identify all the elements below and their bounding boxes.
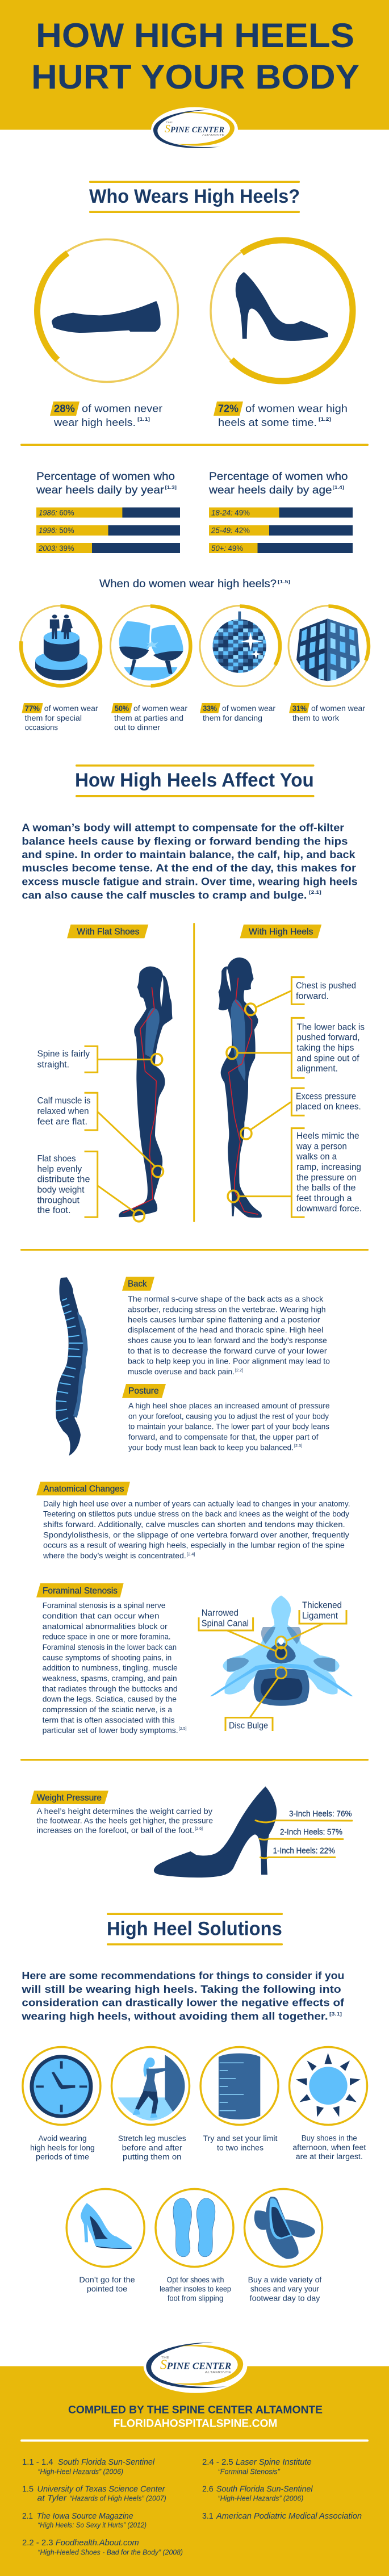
bar chart: by age: 50+: 49% (211, 543, 243, 553)
caption: 31%: of women wear (311, 704, 365, 713)
tip: ruler: to two inches (217, 2144, 263, 2152)
tip: flats: footwear day to day (250, 2294, 320, 2302)
tip: insoles: foot from slipping (168, 2294, 223, 2302)
callout text: ramp: way a person (296, 1141, 347, 1151)
caption: 77%: them for special (25, 713, 82, 722)
callouts: flat shoes (85, 1046, 163, 1222)
bar chart: by year: 1986: 60% (39, 508, 74, 517)
callout text: lower back: alignment. (296, 1064, 338, 1074)
caption: 50% (111, 703, 187, 732)
callout text: knees: placed on knees. (296, 1102, 361, 1111)
heading: High Heel Solutions (107, 1913, 283, 1946)
callout text: ramp: downward force. (296, 1204, 362, 1214)
text: foraminal stenosis: compression of the sciatic nerve, is a (43, 1705, 172, 1714)
label: Weight Pressure (30, 1791, 108, 1804)
tip: flats (244, 2189, 323, 2302)
chart heading: by age: [1.4] (333, 485, 344, 490)
references: left column (22, 2458, 183, 2557)
caption: 50%: of women wear (133, 704, 187, 713)
callout text: flat shoes weight: body weight (37, 1185, 85, 1195)
bar chart: by age: 18-24: 49% (211, 508, 250, 517)
tip: insoles: Opt for shoes with (167, 2276, 224, 2284)
callout text: spine fairly straight: straight. (37, 1060, 69, 1069)
tip: stretch: Stretch leg muscles (118, 2134, 186, 2143)
references: left column: “High Heels: So Sexy it Hurts” (2012) (37, 2521, 147, 2529)
callout text: chest: Chest is pushed (296, 981, 356, 991)
callouts: high heels (227, 977, 305, 1217)
intro paragraph: [2.1] (309, 890, 321, 895)
footer credit (68, 2404, 323, 2429)
text: back (128, 1294, 330, 1376)
footer logo: ALTAMONTE (205, 2371, 232, 2374)
text: foraminal stenosis: addition to numbness, tingling, muscle (43, 1663, 178, 1672)
text: anatomical changes: occurs as a result of wearing high heels, especially in the lumbar region of the spine (43, 1541, 345, 1550)
chart heading: by age (208, 470, 348, 496)
donut: 33% dancing (200, 605, 281, 686)
tip: sun (290, 2047, 367, 2161)
chart heading: by year: Percentage of women who (36, 470, 175, 483)
text: back: muscle overuse and back pain. (128, 1367, 235, 1376)
caption: 77%: of women wear (44, 704, 98, 713)
callout text: lower back: The lower back is (296, 1022, 365, 1032)
caption: 50%: them at parties and (114, 713, 183, 722)
callout text: ramp: ramp, increasing (296, 1162, 361, 1172)
text: anatomical changes (43, 1499, 350, 1560)
label: Back: Back (128, 1279, 148, 1289)
references: right column: 2.6 (202, 2485, 214, 2494)
solutions intro: will still be wearing high heels. Taking the following into (21, 1983, 341, 1995)
solutions intro: [3.1] (329, 2012, 342, 2017)
caption: 77%: 77% (25, 704, 40, 713)
label: With High Heels (240, 925, 321, 938)
text: weight pressure: the footwear. As the heels get higher, the pressure (37, 1817, 213, 1825)
bar chart: by year: 1996: 50% (39, 526, 74, 535)
text: posture: your body must lean back to keep you balanced. (128, 1442, 294, 1452)
heading: How High Heels Affect You (75, 764, 315, 797)
callout text: ramp (296, 1131, 362, 1214)
label: With Flat Shoes: With Flat Shoes (77, 927, 140, 937)
text: posture (128, 1401, 330, 1452)
title: HURT YOUR BODY (31, 58, 359, 96)
callout text: flat shoes weight: help evenly (37, 1164, 82, 1174)
footer logo: PINE CENTER (166, 2360, 231, 2371)
caption: 50%: out to dinner (114, 723, 160, 732)
references: left column: “High-Heeled Shoes - Bad for the Body” (2008) (37, 2549, 183, 2557)
heading: High Heel Solutions: High Heel Solutions (107, 1918, 282, 1939)
footer band (0, 2366, 389, 2576)
figure: woman in flat shoes (119, 967, 173, 1217)
references: left column: South Florida Sun-Sentinel (58, 2458, 155, 2467)
caption: 28%: of women never (82, 403, 162, 415)
caption: 50%: 50% (115, 704, 129, 713)
label: Posture (122, 1384, 166, 1398)
text: posture: forward, and to compensate for that, the upper part of (128, 1432, 319, 1441)
scale: heel height pressure: 1-Inch Heels: 22% (273, 1846, 335, 1855)
label: Foraminal Stenosis: Foraminal Stenosis (43, 1586, 118, 1596)
donut: 50% parties (110, 605, 191, 686)
references: right column: “High-Heel Hazards” (2006) (218, 2494, 303, 2502)
text: weight pressure: increases on the forefoot, or ball of the foot. (37, 1826, 194, 1834)
subheading: when do women wear heels: When do women wear high heels? (99, 578, 277, 590)
tip: stretch (111, 2047, 190, 2161)
references: left column: University of Texas Science Center (37, 2485, 166, 2494)
header band (0, 0, 389, 129)
heading: Who Wears High Heels: Who Wears High Heels? (89, 186, 300, 207)
text: posture: A high heel shoe places an increased amount of pressure (128, 1401, 330, 1410)
intro paragraph: excess muscle fatigue and strain. Over time, wearing high heels (22, 875, 358, 887)
callout text: calf muscle: feet are flat. (37, 1117, 87, 1127)
references: left column: at Tyler (37, 2494, 67, 2503)
text: foraminal stenosis: Foraminal stenosis is a spinal nerve (43, 1601, 166, 1610)
tip: pointed toe: pointed toe (87, 2285, 127, 2293)
caption: 28%: [1.1] (137, 417, 150, 422)
references: left column: 1.1 - 1.4 (22, 2458, 53, 2467)
callout text: flat shoes weight (37, 1154, 90, 1215)
intro paragraph: can also cause the calf muscles to cramp and bulge. (22, 889, 307, 901)
bar chart: by year (36, 508, 180, 553)
tip: ruler (200, 2047, 278, 2152)
tip: clock: periods of time (36, 2153, 89, 2161)
chart heading: by year: wear heels daily by year (36, 484, 165, 496)
donut: 31% work (288, 605, 369, 686)
text: back: to that is to decrease the forward curve of your lower (128, 1346, 327, 1355)
callout text: lower back: pushed forward, (296, 1033, 360, 1043)
scale: heel height pressure: 3-Inch Heels: 76% (289, 1809, 352, 1818)
callout text: lower back: taking the hips (296, 1043, 354, 1053)
chart heading: by age: wear heels daily by age (208, 484, 332, 496)
footer credit: FLORIDAHOSPITALSPINE.COM (114, 2418, 277, 2429)
figure: spine (56, 1277, 88, 1456)
references: left column: 2.1 (22, 2512, 33, 2521)
caption: 72%: of women wear high (245, 403, 348, 415)
tip: stretch: putting them on (123, 2153, 182, 2161)
footer logo: S (160, 2357, 167, 2372)
donut: 72% wear heels (184, 212, 380, 409)
text: weight pressure (37, 1807, 213, 1834)
caption: 72%: [1.2] (319, 417, 331, 422)
intro paragraph: and spine. In order to maintain balance, the calf, hip, and back (22, 848, 355, 860)
references: right column: 2.4 - 2.5 (202, 2458, 233, 2467)
references: left column: 1.5 (22, 2485, 34, 2494)
callout text: calf muscle: relaxed when (37, 1107, 89, 1116)
icon: high heel (236, 272, 328, 341)
intro paragraph: muscles become tense. At the end of the day, this makes for (22, 862, 356, 874)
tip: clock (23, 2047, 101, 2161)
footer logo: THE (161, 2356, 170, 2360)
icon: disco ball (212, 612, 266, 673)
subheading: when do women wear heels: [1.5] (278, 579, 290, 584)
label: Posture: Posture (128, 1386, 159, 1396)
callout text: spine fairly straight (37, 1049, 90, 1069)
logo wordmark: S (165, 123, 170, 135)
callout text: flat shoes weight: throughout (37, 1195, 80, 1205)
solutions intro (21, 1969, 345, 2022)
text: back: displacement of the head and thoracic spine. High heel (128, 1325, 323, 1335)
tip: sun: Buy shoes in the (302, 2134, 357, 2142)
callouts: vertebra labels (199, 1601, 346, 1731)
intro paragraph (22, 821, 358, 901)
bar chart: by year: 2003: 39% (38, 543, 74, 553)
intro paragraph: balance heels cause by flexing or forward bending the hips (22, 835, 348, 847)
references: left column: 2.2 - 2.3 (22, 2539, 53, 2548)
scale: heel height pressure (256, 1809, 352, 1858)
solutions intro: consideration can drastically lower the negative effects of (22, 1997, 345, 2009)
heading: Who Wears High Heels (89, 181, 300, 213)
scale: heel height pressure: 2-Inch Heels: 57% (280, 1828, 342, 1837)
text: foraminal stenosis: Foraminal stenosis in the lower back can (43, 1642, 177, 1651)
tip: insoles (156, 2189, 233, 2302)
tip: pointed toe: Don’t go for the (79, 2276, 135, 2284)
callout text: ramp: walks on a (296, 1152, 337, 1162)
tip: ruler: Try and set your limit (203, 2134, 278, 2143)
references: right column: 3.1 (202, 2512, 214, 2521)
tip: pointed toe (66, 2189, 144, 2293)
text: posture: on your forefoot, causing you to adjust the rest of your body (128, 1411, 329, 1420)
callouts: vertebra labels: Spinal Canal (202, 1619, 249, 1628)
text: anatomical changes: Daily high heel use over a number of years can actually lead to changes in your anatomy. (43, 1499, 350, 1508)
caption: 77%: occasions (25, 723, 58, 732)
logo wordmark: ALTAMONTE (202, 133, 224, 136)
text: weight pressure: [2.6] (195, 1827, 203, 1831)
references: left column: Foodhealth.About.com (56, 2539, 139, 2548)
text: foraminal stenosis: anatomical abnormalities block or (43, 1621, 168, 1630)
figure: big high heel (154, 1787, 277, 1877)
caption: 28% (50, 402, 162, 428)
text: anatomical changes: shifts forward. Additionally, calve muscles can shorten and tendons may thicken. (43, 1520, 345, 1529)
text: posture: to maintain your balance. The lower part of your body leans (128, 1422, 329, 1431)
text: anatomical changes: where the body’s weight is concentrated. (43, 1551, 186, 1560)
label: With High Heels: With High Heels (249, 927, 313, 937)
callout text: chest (296, 981, 356, 1001)
label: Foraminal Stenosis (36, 1583, 124, 1598)
text: foraminal stenosis: cause symptoms of shooting pains, in (43, 1653, 172, 1662)
bar chart: by age: 25-49: 42% (211, 526, 250, 535)
tip: flats: shoes and vary your (250, 2285, 319, 2293)
callout text: ramp: the pressure on (296, 1173, 357, 1182)
logo wordmark (165, 121, 224, 136)
caption: 77% (22, 703, 98, 732)
text: foraminal stenosis: reduce space in one or more foramina. (43, 1632, 171, 1641)
callout text: flat shoes weight: Flat shoes (37, 1154, 76, 1164)
callout text: ramp: feet through a (296, 1194, 352, 1203)
references: left column: “Hazards of High Heels” (2007) (69, 2494, 166, 2502)
callout text: knees (296, 1092, 361, 1111)
caption: 33%: of women wear (222, 704, 275, 713)
references: left column: The Iowa Source Magazine (37, 2512, 133, 2521)
footer logo (144, 2339, 247, 2393)
text: anatomical changes: Spondylolisthesis, or the slippage of one vertebra forward over another, frequently (43, 1530, 349, 1539)
callouts: vertebra labels: Disc Bulge (229, 1721, 268, 1730)
references: right column: South Florida Sun-Sentinel (216, 2485, 313, 2494)
donut: 28% never wear heels (9, 212, 205, 409)
icon: wine glasses (119, 621, 183, 680)
callouts: vertebra labels: Ligament (302, 1611, 338, 1621)
label: Weight Pressure: Weight Pressure (37, 1793, 102, 1803)
text: foraminal stenosis: down the legs. Sciatica, caused by the (43, 1695, 177, 1704)
callouts: vertebra labels: Narrowed (202, 1608, 239, 1618)
logo wordmark: THE (166, 121, 173, 124)
tip: clock: Avoid wearing (39, 2134, 86, 2143)
caption: 72% (214, 402, 348, 428)
callout text: ramp: Heels mimic the (296, 1131, 359, 1141)
text: back: [2.2] (235, 1369, 243, 1373)
text: foraminal stenosis: [2.5] (179, 1727, 187, 1731)
references: right column: “Forminal Stenosis” (218, 2468, 281, 2476)
intro paragraph: A woman’s body will attempt to compensate for the off-kilter (22, 821, 344, 833)
label: Anatomical Changes: Anatomical Changes (43, 1484, 124, 1494)
callout text: flat shoes weight: distribute the (37, 1175, 90, 1185)
tip: sun: are at their largest. (296, 2152, 363, 2161)
logo wordmark: PINE CENTER (170, 126, 224, 135)
callout text: ramp: the balls of the (296, 1184, 355, 1193)
tip: clock: high heels for long (30, 2144, 95, 2152)
footer credit: COMPILED BY THE SPINE CENTER ALTAMONTE (68, 2404, 323, 2416)
text: back: heels causes lumbar spine flattening and a posterior (128, 1315, 320, 1324)
tip: flats: Buy a wide variety of (248, 2276, 322, 2284)
callout text: spine fairly straight: Spine is fairly (37, 1049, 90, 1059)
figure: woman in high heels (218, 957, 262, 1218)
text: foraminal stenosis (42, 1601, 187, 1735)
caption: 28%: wear high heels. (53, 417, 136, 428)
figure: vertebra diagram (210, 1595, 353, 1717)
callout text: lower back: and spine out of (296, 1053, 359, 1063)
chart heading: by year: [1.3] (165, 485, 177, 490)
caption: 31% (289, 703, 365, 722)
references: right column: Laser Spine Institute (236, 2458, 312, 2467)
caption: 31%: them to work (292, 713, 340, 722)
text: foraminal stenosis: that radiates through the buttocks and (43, 1684, 178, 1693)
caption: 33%: 33% (203, 704, 217, 713)
label: With Flat Shoes (67, 925, 148, 938)
text: foraminal stenosis: particular set of lower body symptoms. (43, 1726, 178, 1735)
chart heading: by age: Percentage of women who (209, 470, 348, 483)
text: back: shoes cause you to lean forward and the body’s response (128, 1336, 327, 1345)
text: back: back to help keep you in line. Poor alignment may lead to (128, 1357, 330, 1366)
text: posture: [2.3] (294, 1444, 302, 1448)
callouts: vertebra labels: Thickened (302, 1601, 342, 1611)
caption: 72%: 72% (218, 403, 239, 415)
icon: flat shoe (52, 301, 161, 333)
callout text: flat shoes weight: the foot. (37, 1206, 70, 1215)
icon: wedding cake (35, 614, 87, 680)
callout text: calf muscle: Calf muscle is (37, 1096, 91, 1106)
tip: sun: afternoon, when feet (292, 2143, 366, 2152)
chart heading: by year (36, 470, 177, 496)
caption: 33%: them for dancing (203, 713, 262, 722)
donut: 77% special occasions (20, 605, 101, 686)
text: back: The normal s-curve shape of the back acts as a shock (128, 1294, 324, 1303)
logo: Spine Center Altamonte (151, 107, 238, 152)
icon: office building (296, 618, 360, 681)
text: foraminal stenosis: term that is often associated with this (43, 1715, 175, 1724)
caption: 72%: heels at some time. (218, 417, 317, 428)
heading: How High Heels Affect You: How High Heels Affect You (75, 770, 314, 791)
solutions intro: wearing high heels, without avoiding them all together. (21, 2010, 328, 2022)
title (31, 16, 359, 96)
solutions intro: Here are some recommendations for things to consider if you (22, 1969, 344, 1981)
text: weight pressure: A heel’s height determines the weight carried by (37, 1807, 212, 1816)
references: right column: American Podiatric Medical Association (216, 2512, 362, 2521)
text: back: absorber, reducing stress on the vertebrae. Wearing high (128, 1304, 326, 1314)
callout text: knees: Excess pressure (296, 1092, 356, 1101)
callout text: calf muscle (37, 1096, 91, 1127)
tip: insoles: leather insoles to keep (160, 2285, 231, 2293)
text: anatomical changes: [2.4] (187, 1553, 195, 1557)
callout text: lower back (296, 1022, 365, 1074)
references: right column (202, 2458, 362, 2521)
tip: stretch: before and after (122, 2144, 182, 2152)
text: foraminal stenosis: weakness, spasms, cramping, and pain (42, 1674, 177, 1683)
caption: 31%: 31% (292, 704, 307, 713)
bar chart: by age (209, 508, 353, 553)
references: left column: “High-Heel Hazards” (2006) (37, 2468, 123, 2476)
callout text: chest: forward. (296, 992, 329, 1001)
title: HOW HIGH HEELS (36, 16, 354, 55)
text: foraminal stenosis: condition that can occur when (43, 1611, 159, 1620)
label: Back (122, 1277, 154, 1291)
caption: 33% (200, 703, 275, 722)
caption: 28%: 28% (54, 403, 75, 415)
label: Anatomical Changes (36, 1482, 130, 1495)
text: anatomical changes: Teetering on stilettos puts undue stress on the back and knees as the weight of the body (43, 1509, 349, 1519)
